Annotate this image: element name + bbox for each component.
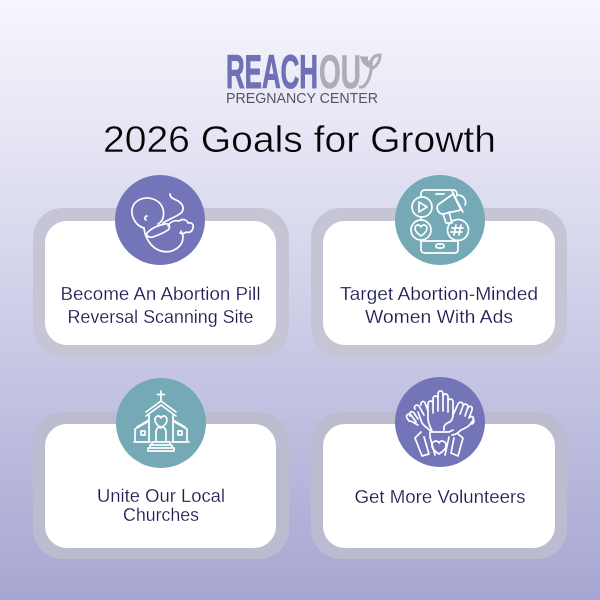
panel text: Churches — [123, 504, 199, 525]
panel text — [97, 485, 225, 525]
panel text: Unite Our Local — [97, 485, 225, 506]
panel text: Become An Abortion Pill — [60, 283, 260, 304]
panel text: Women With Ads — [365, 306, 513, 327]
icon: raised hands with heart — [395, 377, 485, 467]
panel: unite churches — [33, 378, 289, 559]
panel: abortion pill reversal — [33, 175, 289, 357]
title: 2026 Goals for Growth — [103, 119, 496, 160]
panel text: Target Abortion-Minded — [340, 283, 538, 304]
icon: church — [116, 378, 206, 468]
logo: Reach Out Pregnancy Center: OU — [319, 45, 361, 98]
panel: volunteers — [311, 377, 567, 559]
panel text: Reversal Scanning Site — [68, 306, 254, 327]
logo: Reach Out Pregnancy Center: PREGNANCY CENTER — [226, 90, 378, 107]
panel text — [60, 283, 260, 327]
logo: Reach Out Pregnancy Center: REACH — [226, 45, 318, 98]
icon: fetus — [115, 175, 205, 265]
panel text — [340, 283, 538, 327]
panel text: Get More Volunteers — [354, 486, 526, 507]
icon: phone with social symbols — [395, 175, 485, 265]
panel: targeted ads — [311, 175, 567, 357]
